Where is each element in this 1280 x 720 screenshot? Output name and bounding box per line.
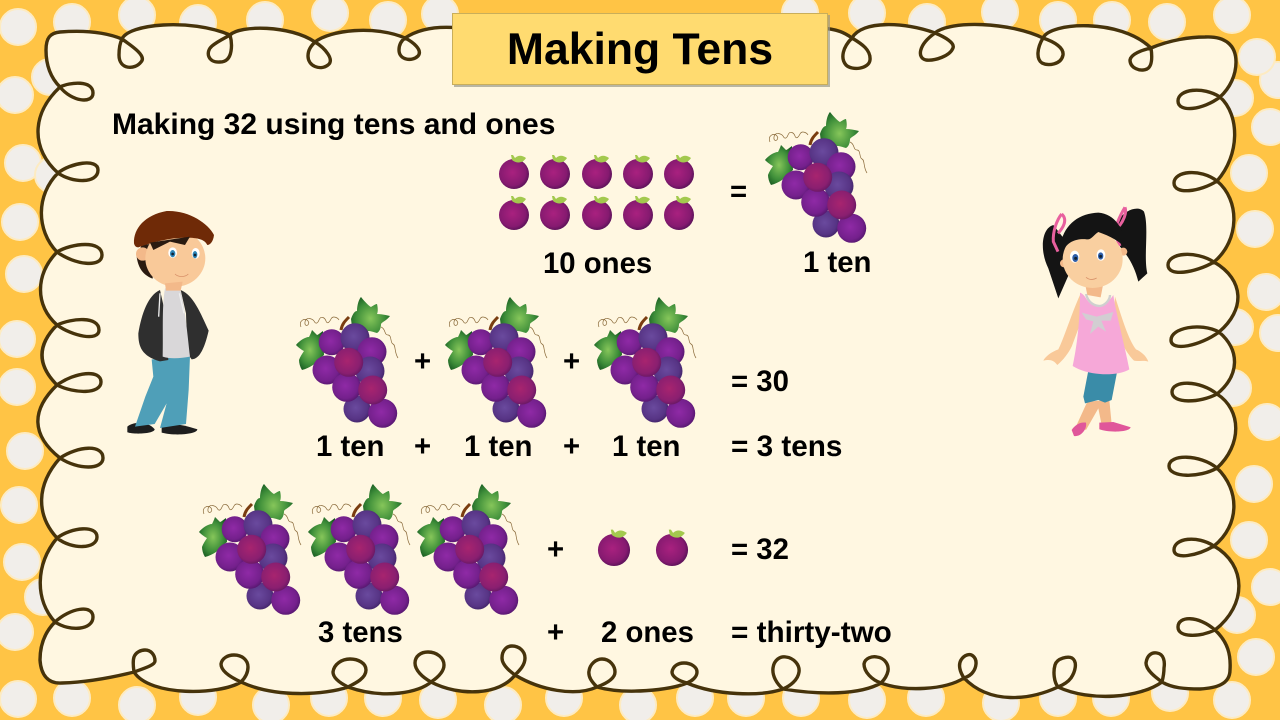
equation: thirty-two: = thirty-two — [731, 616, 892, 649]
plus sign row 3: + — [547, 533, 564, 566]
plus signs row 2: + — [414, 345, 431, 378]
plus signs row 2: + — [563, 345, 580, 378]
equation: equals 3 tens: = 3 tens — [731, 430, 842, 463]
label: 3 tens: 3 tens — [318, 616, 403, 649]
group: ten plums — [499, 155, 694, 230]
row 2 labels: 1 ten + 1 ten + 1 ten — [316, 430, 680, 463]
title banner: Making Tens — [507, 25, 773, 74]
row 2 labels: 1 ten + 1 ten + 1 ten: 1 ten — [612, 430, 680, 463]
heading: making 32: Making 32 using tens and ones — [112, 108, 555, 141]
plus signs row 2 — [414, 345, 580, 378]
row 2: three grape bunches — [296, 297, 696, 428]
row 2 labels: 1 ten + 1 ten + 1 ten: 1 ten — [464, 430, 532, 463]
label: 1 ten: 1 ten — [803, 246, 871, 279]
equation: equals 30: = 30 — [731, 365, 789, 398]
illustration: boy — [127, 211, 214, 434]
equals sign: = — [730, 175, 747, 208]
row 3: three grape bunches — [199, 484, 519, 615]
row 2 labels: 1 ten + 1 ten + 1 ten: + — [414, 430, 431, 463]
grape bunch: one ten — [765, 112, 867, 243]
title banner — [452, 14, 830, 87]
label: 10 ones: 10 ones — [543, 247, 652, 280]
row 2 labels: 1 ten + 1 ten + 1 ten: 1 ten — [316, 430, 384, 463]
row 2 labels: 1 ten + 1 ten + 1 ten: + — [563, 430, 580, 463]
illustration: girl — [1043, 207, 1148, 436]
plus sign label row: + — [547, 616, 564, 649]
equation: equals 32: = 32 — [731, 533, 789, 566]
two plums — [598, 530, 688, 566]
label: 2 ones: 2 ones — [601, 616, 694, 649]
